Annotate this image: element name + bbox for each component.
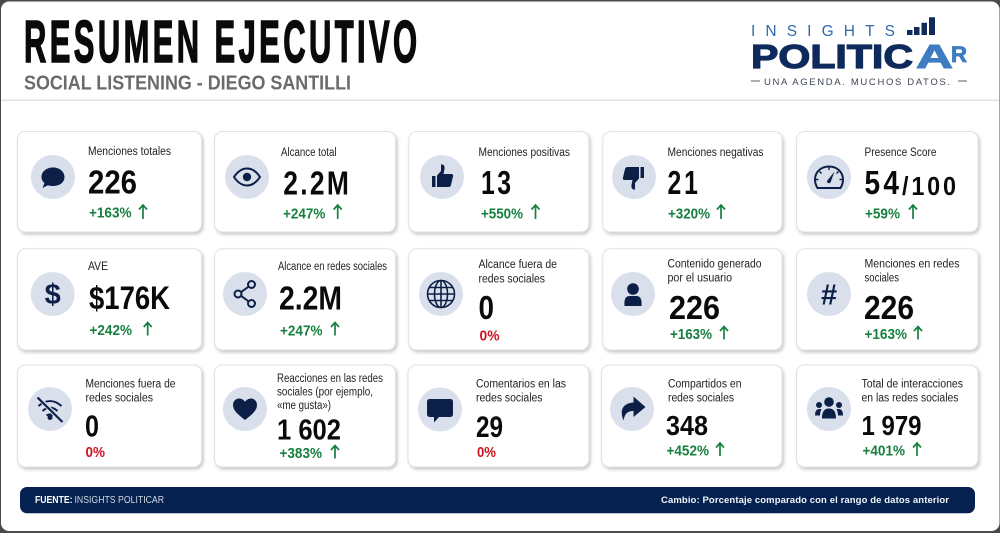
arrow up	[716, 443, 724, 456]
change: +242%	[90, 323, 132, 339]
label: por el usuario	[668, 273, 732, 285]
icon: hashtag	[807, 272, 851, 316]
label	[476, 378, 566, 404]
arrow up	[331, 322, 339, 336]
change: +247%	[283, 206, 325, 222]
value: 1 602	[277, 414, 341, 446]
source note: INSIGHTS POLITICAR	[74, 495, 164, 506]
logo: Insights Politicar: POLITIC	[751, 38, 913, 75]
logo: Insights Politicar: INSIGHTS	[751, 23, 895, 40]
label	[668, 378, 742, 404]
card: Menciones en redes sociales	[796, 249, 978, 350]
logo: Insights Politicar: UNA AGENDA. MUCHOS DATOS.	[764, 77, 950, 88]
label: Menciones negativas	[668, 147, 764, 159]
icon: person	[611, 272, 655, 316]
icon: thumbs up	[420, 155, 464, 199]
label	[862, 378, 963, 404]
label: redes sociales	[668, 392, 734, 404]
title: RESUMEN EJECUTIVO	[24, 9, 417, 76]
label: Alcance fuera de	[478, 259, 557, 271]
value: 29	[476, 411, 503, 444]
label: redes sociales	[476, 392, 543, 404]
label: Total de interacciones	[862, 378, 963, 390]
change: 0%	[86, 445, 105, 461]
label: Alcance en redes sociales	[278, 261, 387, 273]
icon: comment box	[418, 388, 462, 432]
label: Menciones totales	[88, 146, 171, 158]
label: Menciones en redes	[864, 258, 960, 270]
label	[864, 258, 960, 285]
label: redes sociales	[86, 392, 153, 404]
icon: dollar	[31, 272, 75, 316]
arrow up	[331, 446, 339, 458]
card: AVE	[18, 249, 202, 350]
label: Compartidos en	[668, 378, 742, 390]
label	[277, 373, 383, 412]
arrow up	[909, 205, 917, 219]
value: 54	[864, 165, 899, 202]
card: Reacciones en las redes sociales	[214, 365, 396, 467]
logo: Insights Politicar	[751, 17, 967, 88]
card: Menciones totales	[18, 132, 202, 232]
change: +452%	[666, 444, 709, 460]
icon: group of people	[807, 387, 851, 431]
card: Total de interacciones	[796, 365, 978, 467]
label: en las redes sociales	[862, 392, 959, 404]
footer bar	[20, 487, 975, 513]
value: 226	[669, 289, 720, 326]
label: «me gusta»)	[277, 400, 331, 412]
arrow up	[139, 205, 147, 219]
logo: Insights Politicar: A	[916, 38, 953, 75]
label: sociales (por ejemplo,	[277, 387, 373, 399]
value: 2.2M	[279, 280, 342, 317]
icon: thumbs down	[612, 155, 656, 199]
value: 226	[88, 164, 137, 200]
icon: speech bubble	[31, 155, 75, 199]
value: 226	[864, 289, 914, 326]
arrow up	[720, 326, 728, 340]
label: AVE	[88, 261, 108, 273]
icon: hashtag: #	[821, 280, 837, 312]
value: $176K	[89, 280, 170, 316]
label: Alcance total	[281, 147, 336, 159]
icon: globe	[419, 272, 463, 316]
label: Reacciones en las redes	[277, 373, 383, 385]
value: 348	[666, 410, 708, 441]
icon: dollar: $	[45, 279, 61, 311]
arrow up	[532, 205, 540, 219]
logo: Insights Politicar: R	[951, 42, 967, 67]
arrow up	[717, 205, 725, 219]
change: 0%	[480, 329, 500, 345]
card: Contenido generado por el usuario	[603, 249, 782, 350]
label: redes sociales	[478, 274, 545, 286]
label: Contenido generado	[668, 258, 762, 270]
change: +163%	[670, 327, 712, 343]
icon: share arrow	[610, 387, 654, 431]
card: Alcance en redes sociales	[214, 249, 396, 350]
icon: gauge	[807, 155, 851, 199]
card: Presence Score	[796, 132, 978, 232]
value: 1 979	[862, 410, 922, 441]
subtitle: SOCIAL LISTENING - DIEGO SANTILLI	[24, 72, 351, 94]
header separator	[1, 99, 999, 101]
label: Menciones positivas	[478, 147, 570, 159]
value: 2.2M	[283, 166, 349, 202]
card: Compartidos en redes sociales	[602, 365, 782, 467]
icon: heart	[223, 387, 267, 431]
value: 13	[481, 166, 511, 202]
card: Menciones fuera de redes sociales	[18, 365, 202, 467]
source note: FUENTE:	[35, 495, 72, 506]
change: +383%	[280, 446, 322, 462]
card: Alcance total	[214, 132, 396, 232]
change: +59%	[865, 206, 900, 222]
change note: Cambio: Porcentaje comparado con el rango de datos anterior	[661, 495, 949, 506]
icon: share nodes	[223, 272, 267, 316]
change: +320%	[668, 206, 710, 222]
label	[478, 259, 557, 286]
arrow up	[144, 322, 152, 336]
card: Comentarios en las redes sociales	[408, 365, 589, 467]
label: Menciones fuera de	[86, 378, 176, 390]
card: Menciones negativas	[603, 132, 782, 232]
arrow up	[334, 205, 342, 219]
change: 0%	[477, 445, 496, 461]
icon: eye	[225, 155, 269, 199]
change: +163%	[864, 327, 907, 343]
label	[668, 258, 762, 285]
change: +247%	[280, 324, 323, 340]
change: +401%	[862, 444, 905, 460]
value suffix: /100	[902, 173, 956, 201]
label: Presence Score	[864, 147, 936, 159]
value: 0	[478, 289, 494, 326]
label: sociales	[864, 273, 899, 285]
source note	[35, 495, 164, 506]
change: +550%	[481, 206, 523, 222]
arrow up	[914, 326, 922, 340]
label	[86, 378, 176, 404]
label: Comentarios en las	[476, 378, 566, 390]
value: 21	[668, 166, 698, 202]
card: Alcance fuera de redes sociales	[409, 249, 589, 350]
value: 0	[85, 409, 99, 444]
card: Menciones positivas	[409, 132, 589, 232]
icon: wifi off	[28, 387, 72, 431]
change: +163%	[89, 206, 132, 222]
arrow up	[913, 443, 921, 456]
